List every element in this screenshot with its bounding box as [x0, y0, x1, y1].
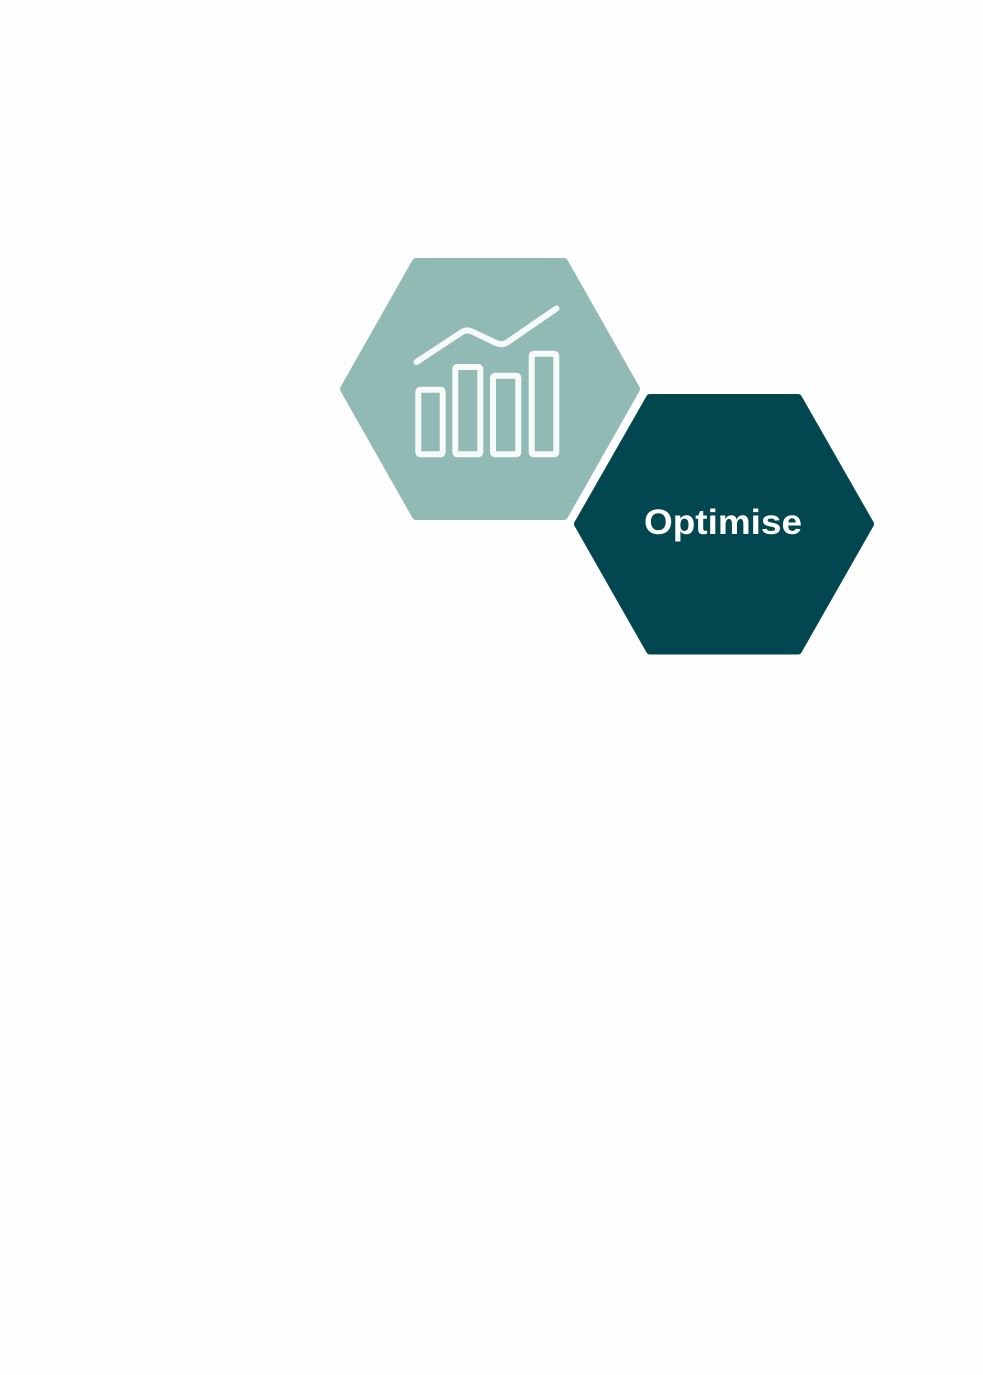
icon: bar 2 [455, 367, 480, 454]
icon: trend line [416, 308, 556, 362]
icon: bar 3 [493, 376, 518, 454]
icon: bar chart with trend line [416, 308, 556, 454]
icon: bar 1 [418, 390, 443, 454]
label: Optimise: Optimise [644, 503, 802, 542]
light teal hexagon with chart icon [344, 262, 636, 516]
hexagon: dark teal [578, 398, 870, 650]
hexagon: light teal [344, 262, 636, 516]
dark teal hexagon with label [578, 398, 870, 650]
icon: bar 4 [532, 354, 556, 454]
